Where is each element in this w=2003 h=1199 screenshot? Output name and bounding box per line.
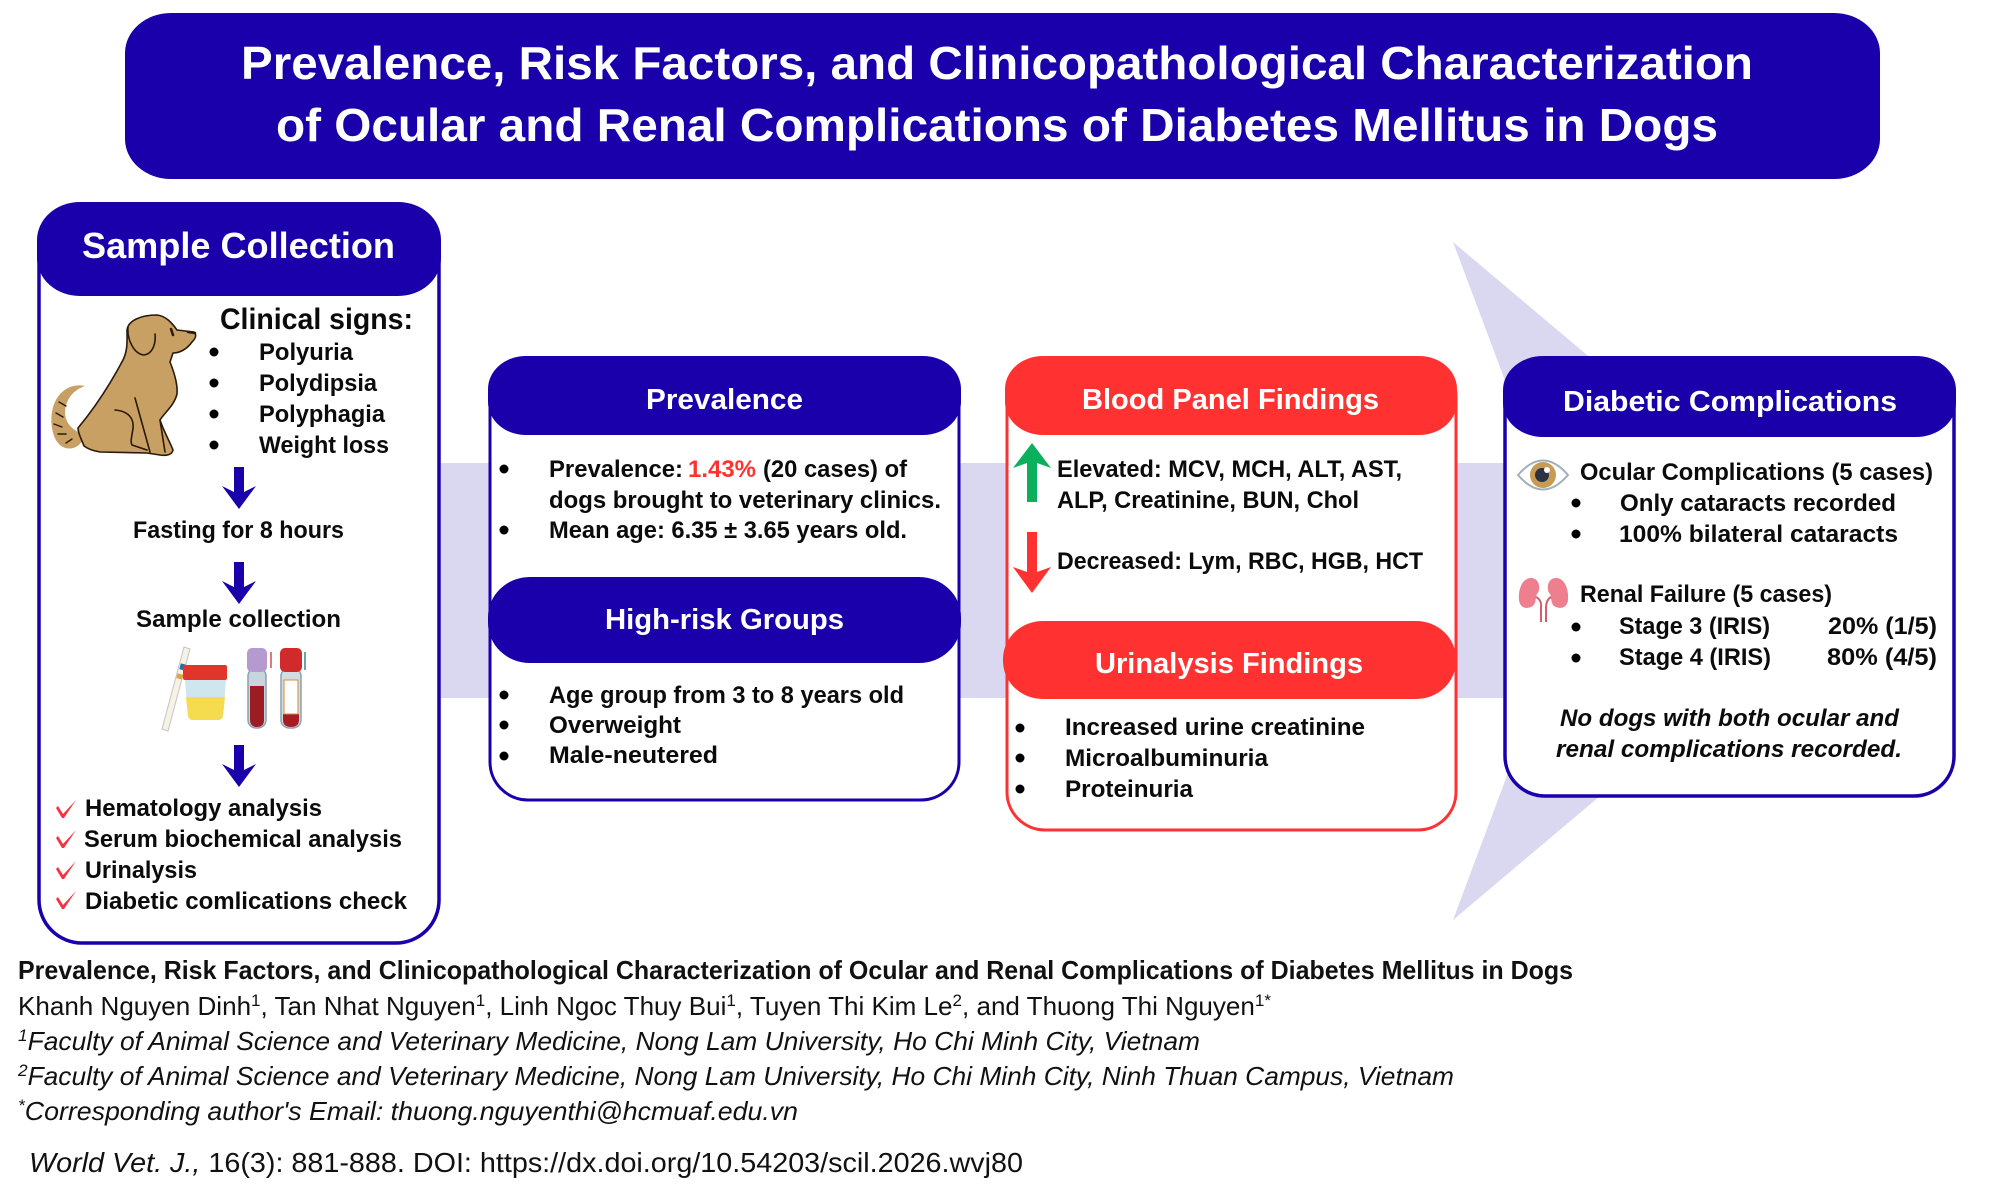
text: elevated values: Elevated: MCV, MCH, ALT, AST,	[1057, 456, 1402, 483]
icon: green up arrow	[1013, 443, 1051, 502]
citation block	[17, 955, 1573, 1178]
title banner: of Ocular and Renal Complications of Diabetes Mellitus in Dogs	[276, 99, 1718, 151]
text: no dual complications note	[1556, 705, 1902, 763]
text: ocular complications: Ocular Complications (5 cases)	[1580, 459, 1933, 486]
icon: red down arrow	[1013, 532, 1051, 593]
text: prevalence findings	[500, 456, 941, 544]
text: elevated values: ALP, Creatinine, BUN, Chol	[1057, 487, 1359, 514]
authors: , and Thuong Thi Nguyen	[962, 991, 1255, 1021]
text: prevalence findings: Prevalence:	[549, 456, 683, 483]
heading: blood panel findings: Blood Panel Findings	[1082, 384, 1379, 416]
background flow arrow	[441, 242, 1855, 920]
authors: , Linh Ngoc Thuy Bui	[485, 991, 726, 1021]
affiliation 1: 1	[18, 1026, 28, 1045]
checklist: analyses	[56, 795, 408, 915]
text: clinical signs: Polydipsia	[259, 370, 378, 397]
text: ocular complications: Only cataracts recorded	[1620, 490, 1896, 517]
text: renal failure	[1572, 581, 1937, 671]
heading: diabetic complications: Diabetic Complications	[1563, 386, 1897, 418]
text: no dual complications note: renal complications recorded.	[1556, 736, 1902, 763]
text: urinalysis list: Proteinuria	[1065, 776, 1194, 803]
icon: urine cup, test strip and blood tubes	[162, 647, 306, 731]
text: prevalence findings: dogs brought to veterinary clinics.	[549, 487, 941, 514]
text: prevalence findings: (20 cases) of	[763, 456, 908, 483]
heading: high-risk groups	[488, 577, 961, 663]
heading: urinalysis findings: Urinalysis Findings	[1095, 648, 1363, 680]
corresponding author: *	[18, 1096, 26, 1115]
authors: Khanh Nguyen Dinh	[18, 991, 251, 1021]
text: prevalence findings: Mean age: 6.35 ± 3.65 years old.	[549, 517, 907, 544]
icon: kidneys	[1519, 578, 1568, 622]
checklist: analyses: Serum biochemical analysis	[84, 826, 402, 853]
heading: prevalence: Prevalence	[646, 384, 803, 416]
icon: sitting dog	[51, 315, 196, 455]
authors: 1	[726, 991, 736, 1010]
checklist: analyses: Diabetic comlications check	[85, 888, 408, 915]
authors: 1	[476, 991, 485, 1010]
heading: sample collection	[37, 202, 441, 296]
text: high-risk list	[500, 682, 904, 769]
authors: , Tan Nhat Nguyen	[261, 991, 476, 1021]
heading: blood panel findings	[1005, 356, 1457, 435]
text: renal failure: Renal Failure (5 cases)	[1580, 581, 1832, 608]
panel: sample collection	[37, 202, 441, 943]
text: urinalysis list: Increased urine creatinine	[1065, 714, 1365, 741]
text: high-risk list: Male-neutered	[549, 742, 718, 769]
text: renal failure: 20% (1/5)	[1828, 613, 1937, 640]
title banner: Prevalence, Risk Factors, and Clinicopathological Characterization	[241, 37, 1753, 89]
authors: 2	[953, 991, 962, 1010]
checklist: analyses: Hematology analysis	[85, 795, 322, 822]
authors: 1	[251, 991, 261, 1010]
text: urinalysis list	[1016, 714, 1365, 803]
affiliation 2: 2	[17, 1061, 28, 1080]
panel: prevalence and high-risk groups	[488, 356, 961, 800]
text: renal failure: 80% (4/5)	[1827, 644, 1937, 671]
authors: 1*	[1255, 991, 1271, 1010]
text: high-risk list: Overweight	[549, 712, 681, 739]
text: prevalence findings: 1.43%	[688, 456, 756, 483]
text: sample collection: Sample collection	[136, 606, 341, 633]
panel: diabetic complications	[1503, 356, 1956, 796]
affiliation 2: Faculty of Animal Science and Veterinary Medicine, Nong Lam University, Ho Chi Minh City, Ninh Thuan Campus, Vietnam	[28, 1061, 1454, 1091]
authors: , Tuyen Thi Kim Le	[736, 991, 953, 1021]
corresponding author: Corresponding author's Email: thuong.nguyenthi@hcmuaf.edu.vn	[25, 1096, 798, 1126]
heading: urinalysis findings	[1003, 621, 1456, 699]
text: clinical signs: Weight loss	[259, 432, 389, 459]
text: ocular complications: 100% bilateral cataracts	[1619, 521, 1898, 548]
text: decreased values: Decreased: Lym, RBC, HGB, HCT	[1057, 548, 1423, 575]
affiliation 1: Faculty of Animal Science and Veterinary Medicine, Nong Lam University, Ho Chi Minh City, Vietnam	[28, 1026, 1200, 1056]
heading: diabetic complications	[1503, 356, 1956, 437]
heading: high-risk groups: High-risk Groups	[605, 604, 844, 636]
panel: blood and urine findings	[1003, 356, 1457, 830]
text: elevated values	[1057, 456, 1402, 514]
heading: sample collection: Sample Collection	[82, 225, 395, 266]
journal reference: World Vet. J., 16(3): 881-888. DOI: https://dx.doi.org/10.54203/scil.2026.wvj80	[29, 1147, 1023, 1178]
text: renal failure: Stage 3 (IRIS)	[1619, 613, 1770, 640]
text: high-risk list: Age group from 3 to 8 years old	[549, 682, 904, 709]
text: fasting: Fasting for 8 hours	[133, 517, 344, 544]
text: clinical signs	[210, 303, 413, 459]
title banner	[125, 13, 1880, 179]
arrow: to sample collection	[222, 562, 256, 604]
checklist: analyses: Urinalysis	[85, 857, 197, 884]
arrow: to fasting	[222, 467, 256, 509]
heading: prevalence	[488, 356, 961, 435]
text: ocular complications	[1572, 459, 1933, 548]
text: no dual complications note: No dogs with both ocular and	[1560, 705, 1900, 732]
text: urinalysis list: Microalbuminuria	[1065, 745, 1269, 772]
text: clinical signs: Clinical signs:	[220, 303, 413, 336]
citation title: Prevalence, Risk Factors, and Clinicopathological Characterization of Ocular and Renal Complications of Diabetes Mellitus in Dogs	[18, 955, 1573, 985]
text: clinical signs: Polyuria	[259, 339, 354, 366]
text: renal failure: Stage 4 (IRIS)	[1619, 644, 1771, 671]
arrow: to analyses	[222, 745, 256, 787]
icon: eye	[1518, 460, 1568, 490]
text: clinical signs: Polyphagia	[259, 401, 386, 428]
